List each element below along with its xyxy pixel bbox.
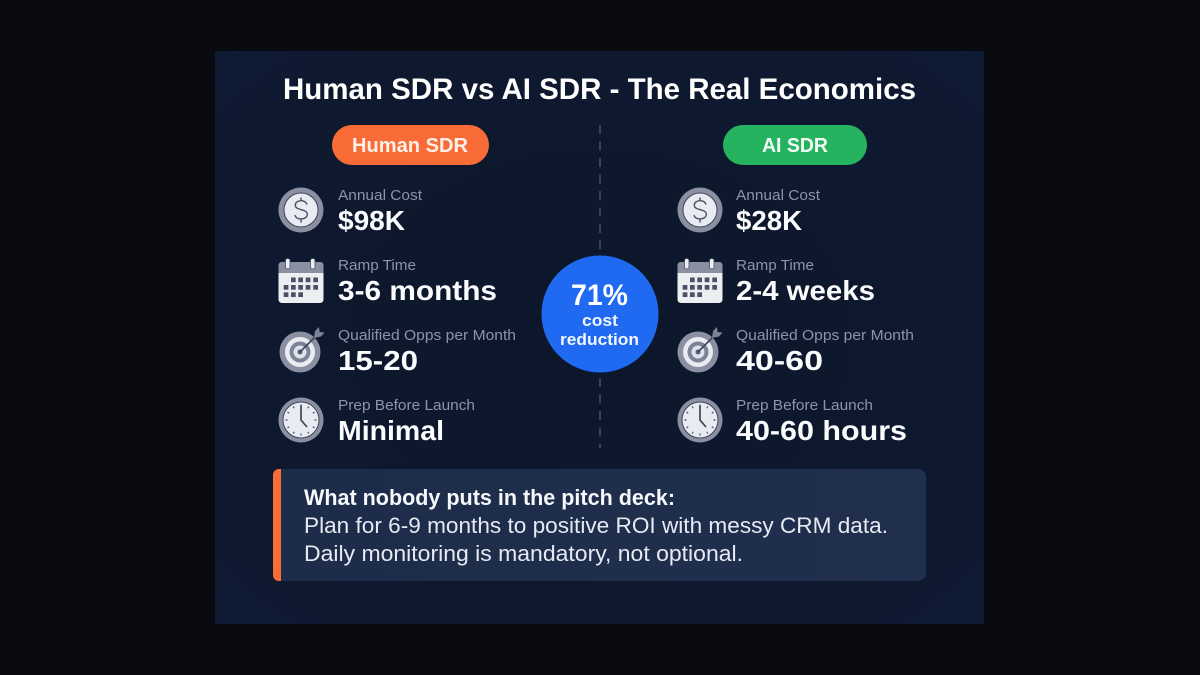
metric: ramp time: 3-6 months (338, 275, 497, 306)
icon: target (280, 327, 324, 372)
badge: AI SDR: AI SDR (762, 135, 829, 157)
metric: ramp time (736, 257, 875, 306)
metric: qualified opps (338, 327, 516, 376)
metric: qualified opps: Qualified Opps per Month (736, 327, 914, 344)
badge: Human SDR (332, 125, 489, 165)
metric: prep before launch: 40-60 hours (736, 415, 907, 446)
metric: annual cost: Annual Cost (736, 187, 821, 204)
icon: clock (278, 398, 324, 442)
metric: annual cost: $98K (338, 205, 405, 236)
icon: clock (678, 398, 722, 442)
icon: dollar coin (678, 188, 722, 232)
callout: 71% cost reduction (542, 256, 658, 372)
icon: calendar (678, 258, 722, 303)
title: Human SDR vs AI SDR - The Real Economics (283, 73, 916, 106)
badge: Human SDR: Human SDR (352, 135, 469, 157)
icon: target (678, 327, 722, 372)
panel: pitch deck warning (273, 469, 926, 581)
metric: prep before launch: Prep Before Launch (736, 397, 873, 414)
callout: 71% cost reduction: 71% (571, 279, 628, 312)
callout: 71% cost reduction: reduction (560, 331, 639, 349)
panel: Human SDR column (278, 187, 516, 446)
metric: qualified opps (736, 327, 914, 376)
metric: annual cost (338, 187, 423, 236)
panel: pitch deck warning: What nobody puts in the pitch deck: (304, 485, 675, 510)
metric: annual cost: $28K (736, 205, 802, 236)
metric: ramp time: 2-4 weeks (736, 275, 875, 306)
icon: dollar coin (278, 188, 324, 232)
center dashed divider (599, 125, 601, 448)
metric: ramp time: Ramp Time (338, 257, 416, 274)
panel: pitch deck warning: Daily monitoring is mandatory, not optional. (304, 541, 743, 566)
metric: ramp time (338, 257, 497, 306)
metric: prep before launch: Prep Before Launch (338, 397, 475, 414)
metric: qualified opps: Qualified Opps per Month (338, 327, 516, 344)
metric: qualified opps: 15-20 (338, 345, 418, 376)
metric: prep before launch (736, 397, 907, 446)
callout: 71% cost reduction: cost (582, 312, 619, 330)
metric: ramp time: Ramp Time (736, 257, 814, 274)
metric: annual cost (736, 187, 821, 236)
badge: AI SDR (723, 125, 867, 165)
metric: prep before launch (338, 397, 475, 446)
metric: qualified opps: 40-60 (736, 345, 823, 376)
panel: AI SDR column (678, 187, 914, 446)
icon: calendar (278, 258, 324, 303)
metric: prep before launch: Minimal (338, 415, 444, 446)
panel: pitch deck warning: Plan for 6-9 months to positive ROI with messy CRM data. (304, 513, 888, 538)
metric: annual cost: Annual Cost (338, 187, 423, 204)
panel: main card (215, 51, 984, 624)
